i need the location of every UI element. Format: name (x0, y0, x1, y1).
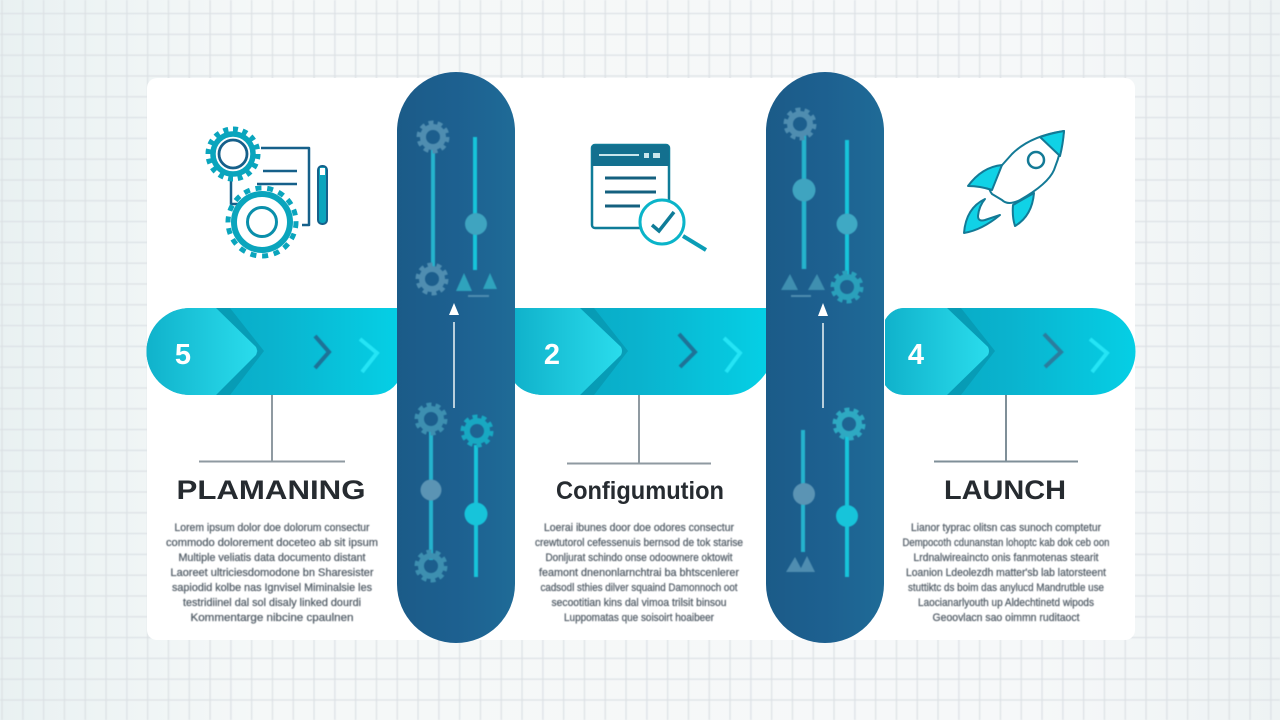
body text: Donljurat schindo onse odoownere oktowit (546, 552, 733, 564)
body text: Lianor typrac olitsn cas sunoch comptetur (911, 522, 1101, 534)
icon: gears and document (208, 129, 327, 256)
body text: Loerai ibunes door doe odores consectur (544, 522, 734, 534)
body text: cadsodl sthies dilver squaind Damonnoch oot (540, 582, 738, 594)
arrow band 2 (515, 308, 766, 395)
connector (567, 395, 711, 464)
connector (199, 395, 345, 462)
body text: testridiinel dal sol disaly linked dourdi (183, 597, 361, 609)
panel: launch (885, 131, 1136, 624)
arrow band 3 (885, 308, 1136, 395)
arrow band 1 (146, 308, 397, 395)
heading: Configumution (556, 477, 724, 505)
body text: Multiple veliatis data documento distant (178, 552, 366, 564)
body text: Dempocoth cdunanstan lohoptc kab dok ceb oon (902, 537, 1110, 549)
body text: feamont dnenonlarnchtrai ba bhtscenlerer (539, 567, 739, 579)
top sliders (781, 110, 862, 302)
panel: configuration (515, 145, 766, 624)
body text (902, 522, 1110, 624)
step number: 4 (908, 339, 924, 371)
body text: Kommentarge nibcine cpaulnen (190, 612, 354, 624)
body text (166, 522, 378, 624)
vertical pill 2 (766, 72, 884, 643)
body text: Geoovlacn sao oimmn ruditaoct (932, 612, 1080, 624)
bottom sliders (786, 410, 864, 577)
vertical pill 1 (397, 72, 515, 643)
centre arrow (818, 303, 828, 316)
body text: Laocianarlyouth up Aldechtinetd wipods (918, 597, 1094, 609)
heading: LAUNCH (944, 475, 1066, 505)
body text: Loanion Ldeolezdh matter'sb lab latorsteent (906, 567, 1106, 579)
white card (147, 78, 1135, 640)
icon: rocket (964, 131, 1064, 233)
body text: crewtutorol cefessenuis bernsod de tok starise (535, 537, 743, 549)
body text: commodo dolorement doceteo ab sit ipsum (166, 537, 378, 549)
top sliders (418, 122, 497, 296)
step number: 5 (175, 339, 191, 371)
icon: window with magnifier (592, 145, 706, 250)
panel: planning (146, 129, 397, 624)
heading: PLAMANING (176, 475, 366, 505)
connector (934, 395, 1078, 462)
body text: secootitian kins dal vimoa trilsit binsou (552, 597, 727, 609)
body text: stuttiktc ds boim das anylucd Mandrutble use (908, 582, 1104, 594)
body text (535, 522, 743, 624)
body text: Lorem ipsum dolor doe dolorum consectur (174, 522, 370, 534)
bottom sliders (416, 404, 492, 580)
body text: Luppomatas que soisoirt hoaibeer (564, 612, 714, 624)
step number: 2 (544, 339, 560, 371)
body text: Lrdnalwireaincto onis fanmotenas stearit (914, 552, 1099, 564)
body text: sapiodid kolbe nas Ignvisel Miminalsie les (172, 582, 372, 594)
body text: Laoreet ultriciesdomodone bn Sharesister (170, 567, 374, 579)
centre arrow (449, 303, 459, 315)
